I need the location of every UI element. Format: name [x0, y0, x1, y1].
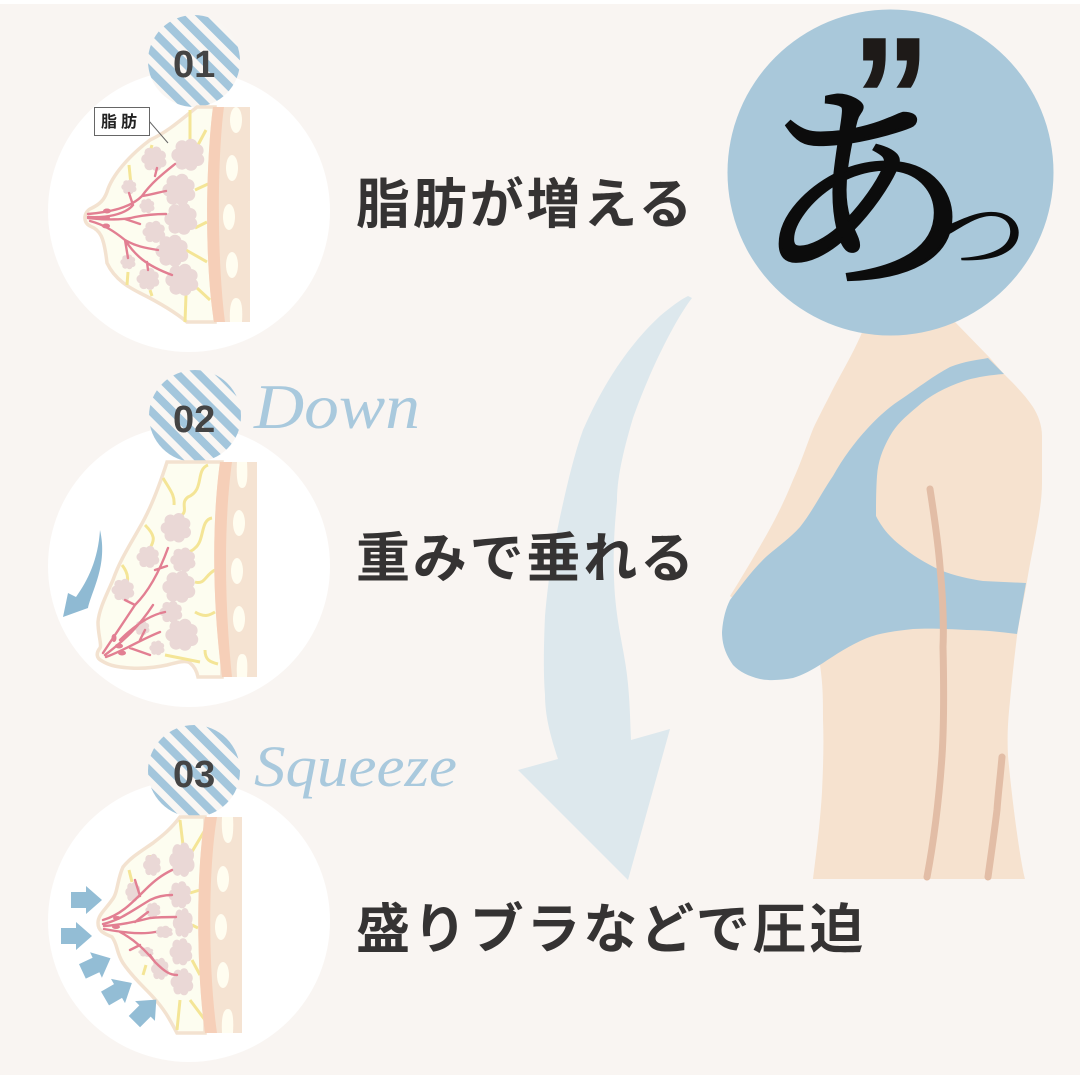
- breast illustration 3: [98, 817, 242, 1033]
- exclamation text: あ: [752, 73, 974, 319]
- icon: pressure arrows: [61, 886, 166, 1032]
- breast illustration 1: [85, 107, 250, 322]
- breast illustration 2: [97, 462, 257, 677]
- bra: [722, 358, 1026, 680]
- body: [730, 322, 1042, 879]
- white circle 3: [48, 780, 330, 1062]
- panel: step 1: [48, 15, 695, 352]
- small tsu: っ: [914, 163, 1043, 287]
- step 1 caption: 脂肪が増える: [356, 175, 695, 235]
- step number badge 01: 01: [173, 44, 215, 86]
- panel: step 3: [48, 725, 866, 1062]
- figure: torso side view: [722, 322, 1042, 879]
- step number badge 01: [148, 15, 240, 107]
- step number badge 02: 02: [173, 399, 215, 441]
- speech circle: [728, 0, 1054, 336]
- large curved arrow: [518, 296, 692, 880]
- step number badge 03: [148, 725, 240, 817]
- icon: down arrow: [63, 530, 102, 617]
- white circle 1: [48, 70, 330, 352]
- quote mark: ”: [851, 0, 931, 197]
- fat label: [94, 108, 168, 143]
- Squeeze label: Squeeze: [254, 734, 457, 799]
- Down label: Down: [253, 372, 420, 442]
- white circle 2: [48, 425, 330, 707]
- panel: step 2: [48, 370, 697, 707]
- step number badge 03: 03: [173, 754, 215, 796]
- step number badge 02: [149, 370, 241, 462]
- waist line: [988, 757, 1002, 877]
- fat label: 脂肪: [101, 113, 141, 131]
- step 3 caption: 盛りブラなどで圧迫: [356, 900, 866, 960]
- arm line: [927, 489, 944, 877]
- step 2 caption: 重みで垂れる: [356, 529, 697, 589]
